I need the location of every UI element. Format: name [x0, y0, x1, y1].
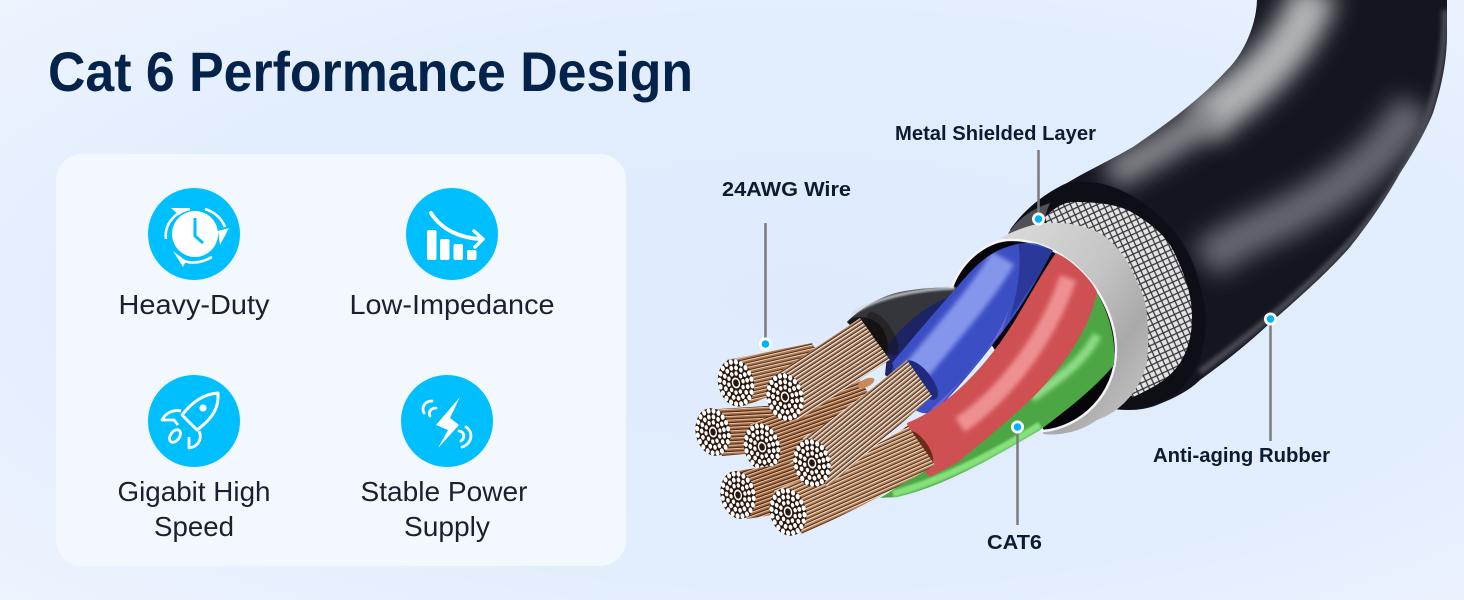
- icon: lightning bolt with waves: [401, 375, 493, 467]
- copper bundle G: [765, 426, 935, 540]
- copper bundle F: [720, 462, 801, 519]
- feature: Stable Power Supply: [360, 375, 528, 542]
- callout: Metal Shielded Layer: Metal Shielded Layer: [895, 123, 1096, 145]
- copper bundle D: [744, 378, 874, 468]
- feature: Stable Power Supply: Supply: [404, 511, 490, 542]
- cable opening: [952, 240, 1116, 431]
- metal shielded layer: gray inner edge: [1006, 203, 1050, 239]
- metal shield: silver band: [1000, 223, 1148, 434]
- feature: Gigabit High Speed: [118, 375, 270, 542]
- copper bundle C: [695, 406, 774, 456]
- callout: Metal Shielded Layer: [895, 123, 1096, 226]
- copper bundle B: [766, 312, 899, 421]
- label: Stable Power Supply: Stable Power: [360, 476, 528, 507]
- callout: 24AWG Wire: [722, 179, 851, 350]
- illustration: cable cross-section: [691, 0, 1464, 540]
- label: Low-Impedance: Low-Impedance: [350, 289, 554, 320]
- blue insulated pair: [892, 243, 1053, 414]
- callout: CAT6: [987, 420, 1042, 554]
- callout: Anti-aging Rubber: Anti-aging Rubber: [1153, 445, 1330, 467]
- title: Cat 6 Performance Design: [48, 40, 693, 103]
- copper bundle E: [788, 360, 932, 491]
- icon: clock with rotating arrows: [148, 188, 240, 280]
- callout: Anti-aging Rubber: [1153, 312, 1330, 467]
- icon: rocket: [148, 375, 240, 467]
- wires: [691, 242, 1114, 540]
- callout: 24AWG Wire: 24AWG Wire: [722, 179, 851, 201]
- panel: features: [56, 154, 626, 566]
- green insulated pair: [880, 293, 1114, 498]
- red insulated pair: [895, 253, 1097, 479]
- metal shielded layer: knurled braid: [1045, 202, 1192, 397]
- black sheath: [847, 288, 955, 385]
- callout: CAT6: CAT6: [987, 532, 1042, 554]
- cable jacket: [1000, 0, 1464, 420]
- icon: falling bars with arrow: [406, 188, 498, 280]
- copper bundle A: [718, 343, 815, 407]
- label: Heavy-Duty: Heavy-Duty: [118, 289, 270, 320]
- feature: Gigabit High Speed: Speed: [154, 511, 234, 542]
- label: Gigabit High Speed: Gigabit High: [118, 476, 270, 507]
- feature: Heavy-Duty: [118, 188, 270, 320]
- feature: Low-Impedance: [350, 188, 554, 320]
